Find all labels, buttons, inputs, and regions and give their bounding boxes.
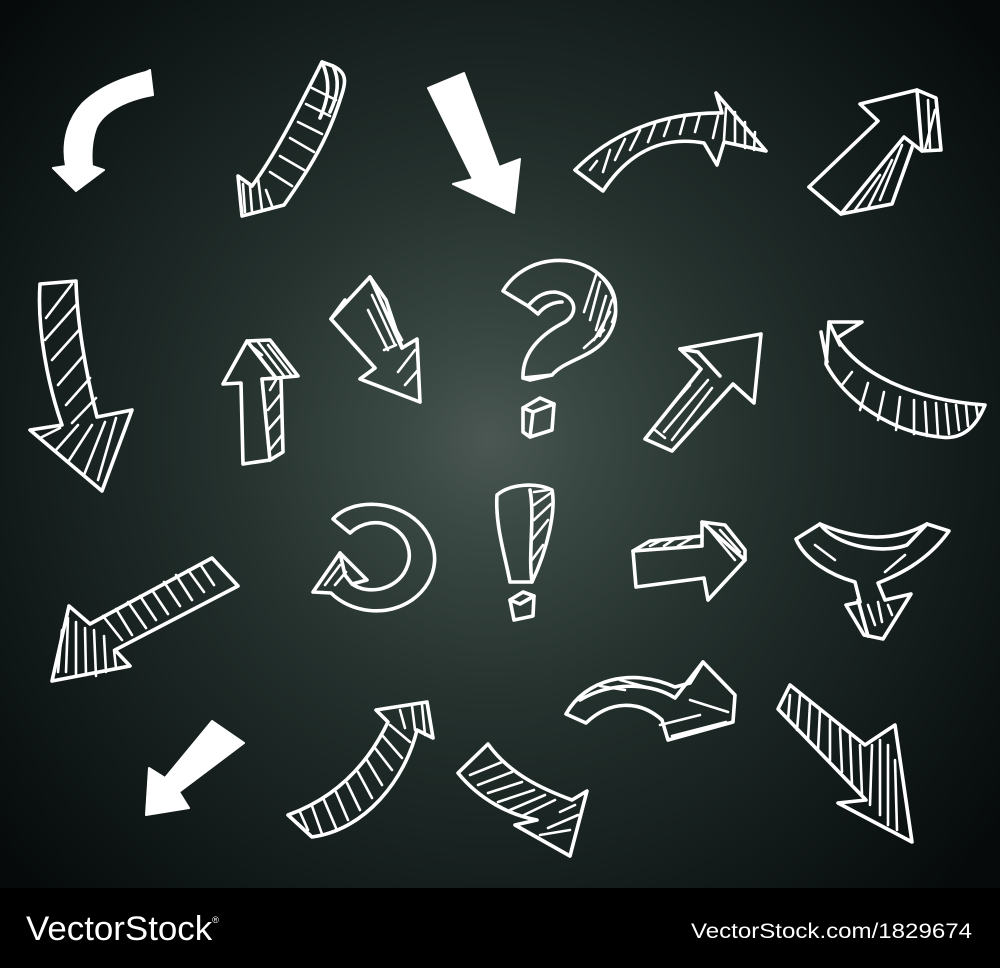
footer logo: VectorStock: ® xyxy=(212,915,219,925)
question mark xyxy=(503,260,616,437)
arrow: hatched curved right xyxy=(575,93,766,191)
arrow: outlined down-right 3D xyxy=(331,277,420,402)
arrow: hatched down-right xyxy=(778,685,912,842)
arrow: outlined up 3D xyxy=(223,340,298,464)
arrow: outlined up-right 3D xyxy=(645,334,761,451)
footer url: VectorStock.com/1829674 xyxy=(691,920,972,943)
arrow: hatched long down xyxy=(30,281,132,491)
arrow: outlined up-right 3D xyxy=(809,90,941,214)
arrow: solid straight down-right xyxy=(428,73,520,213)
arrow: solid small down-left xyxy=(146,721,244,815)
arrow: hatched curved right lower xyxy=(458,744,587,856)
footer logo: VectorStock: VectorStock xyxy=(26,910,207,948)
arrow: forked down xyxy=(796,524,949,639)
arrow: hatched curved left xyxy=(821,322,985,438)
arrow: outlined curved right 3D xyxy=(566,662,735,740)
arrow: solid curved down-left xyxy=(53,70,153,191)
arrow: circular outlined xyxy=(313,504,435,611)
arrow: hatched long down-left xyxy=(238,62,344,216)
arrow: outlined right 3D xyxy=(633,522,745,600)
arrow: hatched curved up-right xyxy=(288,702,433,837)
footer bar xyxy=(0,888,1000,968)
arrow: hatched down-left xyxy=(52,558,238,681)
exclamation mark xyxy=(497,485,553,620)
